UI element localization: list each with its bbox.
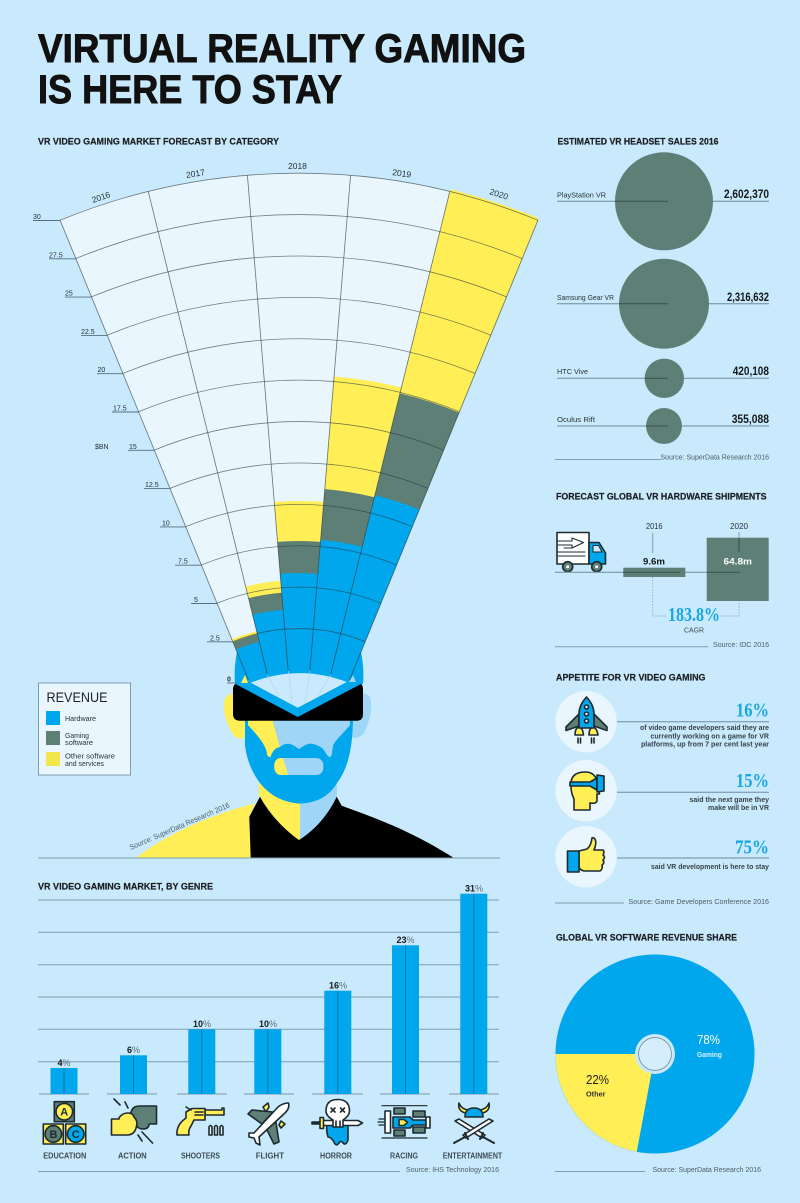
bubble labels: PlayStation VR	[557, 190, 607, 200]
bar values: 31%	[465, 883, 483, 893]
baselines	[39, 1093, 499, 1095]
legend: hardware: Hardware	[65, 714, 96, 723]
inner axis	[623, 571, 680, 573]
CAGR value: CAGR	[684, 626, 705, 634]
icon: education blocks: C	[72, 1129, 80, 1141]
value labels: 64.8m	[724, 556, 752, 568]
icon: education blocks: B	[50, 1129, 58, 1141]
sector 2016	[60, 191, 299, 803]
neck	[259, 775, 337, 842]
icon: education blocks: A	[60, 1106, 68, 1118]
sector 2017	[148, 175, 299, 803]
pie: other	[556, 1054, 655, 1152]
value axis labels: 20	[98, 367, 105, 374]
headset black body	[233, 684, 363, 721]
pie label other: Other	[586, 1090, 606, 1098]
bar values: 10%	[193, 1019, 211, 1029]
icon circle 3	[555, 826, 617, 887]
value axis labels: 0	[227, 676, 231, 684]
CAGR value	[668, 604, 720, 634]
heading: FORECAST GLOBAL VR HARDWARE SHIPMENTS	[556, 492, 766, 502]
text block 75%: said VR development is here to stay	[651, 862, 770, 871]
year leaders	[653, 532, 739, 553]
bar values: 23%	[396, 935, 415, 945]
heading: GLOBAL VR SOFTWARE REVENUE SHARE	[556, 932, 737, 944]
label: action: ACTION	[118, 1152, 147, 1160]
icon: delivery truck	[557, 532, 606, 572]
blue V band	[235, 682, 362, 720]
value axis labels: 5	[194, 597, 198, 604]
head cap behind fan	[235, 652, 363, 684]
text block 16%	[617, 700, 769, 748]
heading: forecast by category: VR VIDEO GAMING MARKET FORECAST BY CATEGORY	[38, 136, 280, 148]
value axis labels: 27.5	[49, 252, 63, 259]
chart baseline	[38, 857, 500, 859]
icon: plane	[248, 1103, 289, 1145]
legend: other: and services	[65, 759, 104, 768]
inner leader lines	[615, 201, 668, 426]
legend: revenue	[38, 683, 130, 775]
bubble labels: HTC Vive	[557, 367, 588, 376]
year labels: 2019	[392, 167, 412, 180]
bar values: 16%	[329, 980, 347, 990]
pie label other: 22%	[586, 1072, 609, 1087]
face light side	[273, 720, 350, 757]
bubble values: 2,316,632	[727, 290, 769, 304]
title: IS HERE TO STAY	[38, 68, 342, 112]
value axis labels: 30	[33, 214, 41, 221]
sector 2020	[299, 189, 539, 803]
icon: skull and sword	[312, 1100, 362, 1145]
source: Source: SuperData Research 2016	[652, 1165, 761, 1174]
value axis labels: 25	[65, 291, 73, 298]
bubble values: 2,602,370	[724, 187, 769, 201]
source: Source: Game Developers Conference 2016	[628, 897, 769, 906]
pie: gaming	[556, 954, 754, 1154]
title: VIRTUAL REALITY GAMING	[38, 27, 526, 71]
year labels: 2018	[288, 161, 307, 171]
heading: APPETITE FOR VR VIDEO GAMING	[556, 672, 706, 684]
bubble: PlayStation VR	[615, 152, 713, 250]
value axis labels: 7.5	[178, 559, 188, 566]
icon: viking helmet and swords	[454, 1103, 494, 1143]
bubble: Samsung Gear VR	[619, 259, 709, 349]
title	[38, 27, 526, 112]
text block 75%	[617, 837, 770, 871]
bar centre lines	[64, 894, 474, 1094]
bar values	[58, 883, 483, 1068]
bubble: Oculus Rift	[646, 408, 682, 444]
label: horror: HORROR	[320, 1152, 352, 1160]
pie label gaming: 78%	[697, 1032, 720, 1047]
figure: head with VR headset	[136, 671, 454, 858]
icon: education blocks	[43, 1102, 86, 1144]
legend: other	[46, 752, 115, 768]
bar values: 10%	[259, 1019, 277, 1029]
grid lines	[38, 900, 499, 1062]
fan grid rings	[60, 173, 538, 642]
axis line	[555, 571, 740, 573]
source: Source: SuperData Research 2016	[660, 452, 769, 462]
bar 2016	[623, 568, 685, 577]
legend: gaming software: Gaming	[65, 731, 89, 740]
text block 75%: 75%	[735, 837, 769, 859]
label: education: EDUCATION	[43, 1152, 86, 1160]
icon circle 1	[555, 691, 617, 752]
panel: appetite	[555, 672, 770, 906]
inner axis 2020	[707, 571, 740, 573]
value axis labels: 12.5	[145, 482, 159, 489]
text block 15%: make will be in VR	[708, 803, 769, 812]
pie label other	[586, 1072, 609, 1098]
label: racing: RACING	[390, 1152, 418, 1160]
icon: head with headset	[570, 772, 604, 810]
headset band markers	[241, 675, 356, 683]
source: Source: IDC 2016	[713, 640, 769, 649]
text block 16%: currently working on a game for VR	[650, 732, 769, 740]
text block 16%: of video game developers said they are	[640, 723, 769, 732]
bubble labels: Oculus Rift	[557, 415, 596, 424]
bubble values	[724, 187, 769, 426]
sector 2019	[299, 175, 450, 803]
text block 16%: 16%	[736, 700, 769, 722]
value axis labels: 2.5	[210, 635, 220, 642]
bubble labels: Samsung Gear VR	[557, 293, 615, 302]
label: flight: FLIGHT	[256, 1152, 284, 1160]
value axis labels: 15	[129, 444, 137, 451]
dotted CAGR connector	[653, 577, 739, 616]
icon: boxing gloves	[112, 1099, 156, 1143]
icon: racing car	[378, 1106, 430, 1138]
panel: software revenue share	[555, 932, 761, 1174]
label: entertainment: ENTERTAINMENT	[443, 1152, 502, 1160]
bars	[50, 894, 487, 1094]
heading: ESTIMATED VR HEADSET SALES 2016	[558, 136, 718, 148]
row lines	[557, 201, 769, 426]
mouth	[274, 758, 323, 775]
legend: gaming software	[46, 731, 93, 747]
text block 16%: platforms, up from 7 per cent last year	[641, 740, 769, 748]
bubble values: 420,108	[733, 364, 769, 378]
legend: other: Other software	[65, 752, 115, 760]
value axis labels	[33, 214, 231, 684]
icon circle 2	[555, 760, 617, 821]
left shoulder	[136, 803, 255, 858]
right ear	[352, 693, 371, 738]
year labels: 2020	[730, 522, 749, 531]
heading: genre: VR VIDEO GAMING MARKET, BY GENRE	[38, 882, 213, 892]
value axis ticks	[33, 220, 236, 683]
bubble values: 355,088	[732, 412, 769, 426]
icon: rocket	[566, 697, 607, 743]
bar chart: market by genre	[38, 883, 499, 1094]
year labels: 2016	[90, 189, 112, 205]
source: genre chart: Source: IHS Technology 2016	[406, 1165, 499, 1174]
value axis labels: 10	[162, 520, 170, 527]
bubble: HTC Vive	[645, 359, 684, 398]
CAGR value: 183.8%	[668, 604, 720, 626]
bar values: 4%	[58, 1058, 71, 1068]
sector 2018	[247, 173, 351, 803]
fan spokes	[60, 175, 538, 680]
legend: revenue: REVENUE	[46, 690, 108, 705]
shirt	[249, 797, 454, 858]
face yellow side	[248, 720, 280, 757]
bar 2020	[707, 538, 769, 601]
value labels	[643, 556, 752, 568]
pie label gaming	[697, 1032, 722, 1059]
bubble labels	[557, 190, 615, 424]
pie hub	[635, 1034, 675, 1074]
year labels: 2020	[488, 186, 510, 202]
text block 15%	[617, 770, 770, 812]
value axis labels: 17.5	[113, 406, 127, 412]
text block 15%: said the next game they	[690, 795, 770, 804]
bar values: 6%	[127, 1045, 140, 1055]
text block 15%: 15%	[736, 770, 769, 792]
value axis labels: 22.5	[81, 329, 95, 336]
year labels	[90, 161, 510, 205]
value labels: 9.6m	[643, 556, 665, 568]
pie label gaming: Gaming	[697, 1050, 722, 1059]
icon: revolver	[177, 1107, 224, 1135]
fan chart: revenue forecast	[33, 161, 539, 803]
visor lens	[251, 671, 347, 708]
year labels: 2017	[185, 167, 206, 180]
year labels: 2016	[646, 522, 663, 531]
panel: headset sales	[555, 136, 769, 462]
beard and face	[245, 716, 353, 804]
year labels	[646, 522, 749, 531]
left ear	[224, 693, 246, 738]
value axis labels: $BN	[95, 444, 109, 451]
panel: hardware shipments	[555, 492, 769, 649]
legend: gaming software: software	[65, 738, 93, 747]
icon: thumbs up	[568, 838, 604, 872]
source: fan chart: Source: SuperData Research 2016	[128, 801, 231, 852]
label: shooters: SHOOTERS	[181, 1152, 221, 1160]
